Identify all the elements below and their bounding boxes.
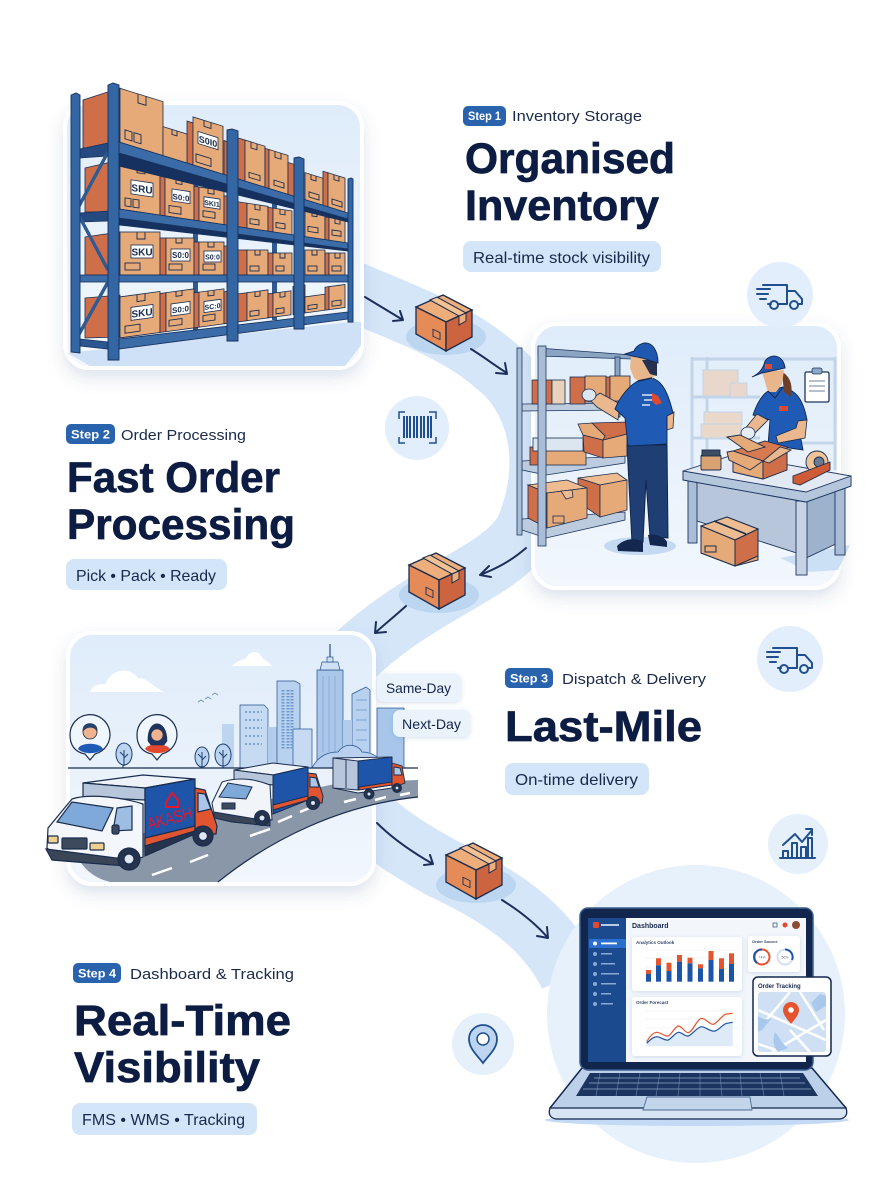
arrow: box to laptop: [502, 900, 548, 938]
text block: step 1: Organised: [465, 135, 675, 183]
cardboard box on path 1: [406, 295, 486, 355]
horizon line: [68, 767, 418, 769]
customer avatar pins: [70, 715, 177, 760]
worker packing box: [741, 356, 807, 450]
line chart card: [632, 997, 742, 1056]
text block: step 1: Inventory Storage: [512, 108, 642, 125]
laptop background circle: [547, 865, 845, 1163]
middle delivery truck: [212, 763, 323, 826]
keyboard: [576, 1073, 818, 1096]
boxes: second shelf: SKI1: [204, 200, 220, 209]
text block: step 1: Step 1: [468, 109, 501, 123]
callout: next-day: [393, 710, 470, 737]
panel: laptop dashboard illustration: [545, 908, 849, 1126]
text block: step 4: FMS • WMS • Tracking: [82, 1112, 245, 1129]
icon: barcode scanner: [385, 396, 449, 460]
text block: step 4: [72, 963, 294, 1135]
birds: [198, 693, 218, 702]
screen: [588, 918, 806, 1062]
bar chart card: Analytics Outlook: [636, 940, 675, 945]
boxes: third shelf: S0:0: [172, 251, 189, 260]
laptop base: [550, 1068, 846, 1113]
boxes: third shelf: SKU: [131, 248, 153, 258]
icon: delivery truck: [747, 262, 813, 328]
icon: rising chart: [768, 814, 828, 874]
text block: step 4: Step 4: [78, 966, 116, 980]
trees: [116, 743, 231, 768]
boxes: top shelf: S0I0: [199, 134, 217, 149]
lead delivery truck with brand: AKASH: [145, 804, 194, 834]
text block: step 2: Order Processing: [121, 427, 246, 444]
worker picking items: [582, 343, 674, 552]
rack uprights: [71, 83, 353, 360]
panel: dispatch and delivery illustration: [46, 633, 418, 884]
far delivery truck: [333, 757, 405, 799]
road: [75, 780, 418, 882]
winding path ribbon: delivery to dashboard: [360, 810, 570, 975]
order tracking map card: Order Tracking: [758, 984, 801, 990]
donut card: [748, 936, 800, 972]
boxes: third shelf: S0:0: [205, 254, 220, 262]
boxes: left sides: [83, 88, 120, 338]
text block: step 4: Dashboard & Tracking: [130, 966, 294, 983]
bar chart card: [632, 937, 742, 991]
text block: step 1: Inventory: [465, 182, 659, 230]
boxes: third shelf: [120, 232, 345, 275]
boxes: bottom shelf: SC:0: [205, 303, 221, 312]
arrow: trucks to box: [377, 823, 433, 865]
shelf beams: [80, 142, 348, 349]
text block: step 3: Step 3: [510, 672, 548, 686]
city skyline: [222, 644, 404, 768]
text block: step 2: Pick • Pack • Ready: [76, 568, 216, 585]
sidebar: [588, 918, 626, 1062]
packing table: [683, 455, 851, 575]
box on table, jar and tape dispenser: [701, 435, 830, 485]
back uprights: [193, 170, 277, 335]
text block: step 3: On-time delivery: [515, 772, 638, 789]
boxes: second shelf: S0:0: [173, 192, 190, 204]
boxes: second shelf: SRU: [131, 183, 153, 197]
arrow: box to trucks: [375, 606, 406, 633]
text block: step 4: Real-Time: [74, 997, 291, 1045]
callout: next-day: Next-Day: [402, 716, 461, 732]
floor box: [701, 517, 758, 566]
donut card: Order Source: [752, 939, 778, 944]
metal shelving unit: [522, 348, 632, 538]
text block: step 3: Dispatch & Delivery: [562, 671, 707, 688]
boxes: bottom shelf: [120, 266, 345, 338]
cardboard box on path 2: [399, 553, 479, 613]
background shelf: [692, 357, 835, 470]
text block: step 3: Last-Mile: [505, 703, 702, 751]
text block: step 2: Step 2: [71, 428, 110, 442]
callout: same-day: Same-Day: [386, 680, 451, 696]
arrow: rack to box: [365, 297, 403, 321]
donut card: 56%: [781, 956, 789, 960]
icon: location pin: [452, 1013, 514, 1075]
text block: step 1: [463, 106, 675, 272]
winding path ribbon: storage to order processing to delivery: [345, 288, 539, 665]
arrow: box to packing: [471, 349, 507, 374]
boxes: top shelf: [120, 88, 345, 212]
dashboard header: Dashboard: [632, 923, 669, 930]
text block: step 3: [505, 668, 707, 795]
order tracking map card: [753, 977, 831, 1056]
left diagonal bracing: [78, 152, 108, 336]
boxes: bottom shelf: S0:0: [172, 304, 189, 315]
screen bezel: [580, 908, 813, 1070]
cardboard box on path 3: [436, 843, 516, 903]
text block: step 2: Processing: [67, 501, 295, 549]
panel: inventory storage illustration: [65, 83, 362, 368]
callout: same-day: [377, 674, 461, 702]
panel: order processing illustration: [517, 324, 851, 588]
shelf uprights: [517, 346, 546, 546]
dashboard header: [632, 921, 800, 930]
clipboard: [805, 368, 829, 402]
donut card: 74%: [758, 956, 766, 960]
icon: dispatch truck: [757, 626, 823, 692]
clouds: [90, 652, 272, 692]
text block: step 4: Visibility: [74, 1044, 260, 1092]
text block: step 2: Fast Order: [67, 454, 280, 502]
boxes: bottom shelf: SKU: [131, 307, 153, 321]
text block: step 1: Real-time stock visibility: [473, 250, 650, 267]
boxes: second shelf: [120, 162, 345, 243]
line chart card: Order Forecast: [636, 1000, 669, 1005]
arrow: packing to box: [480, 548, 526, 577]
text block: step 2: [66, 424, 295, 590]
trackpad: [643, 1097, 752, 1110]
shelf boxes: [528, 376, 630, 528]
lead delivery truck with brand: [46, 775, 217, 870]
